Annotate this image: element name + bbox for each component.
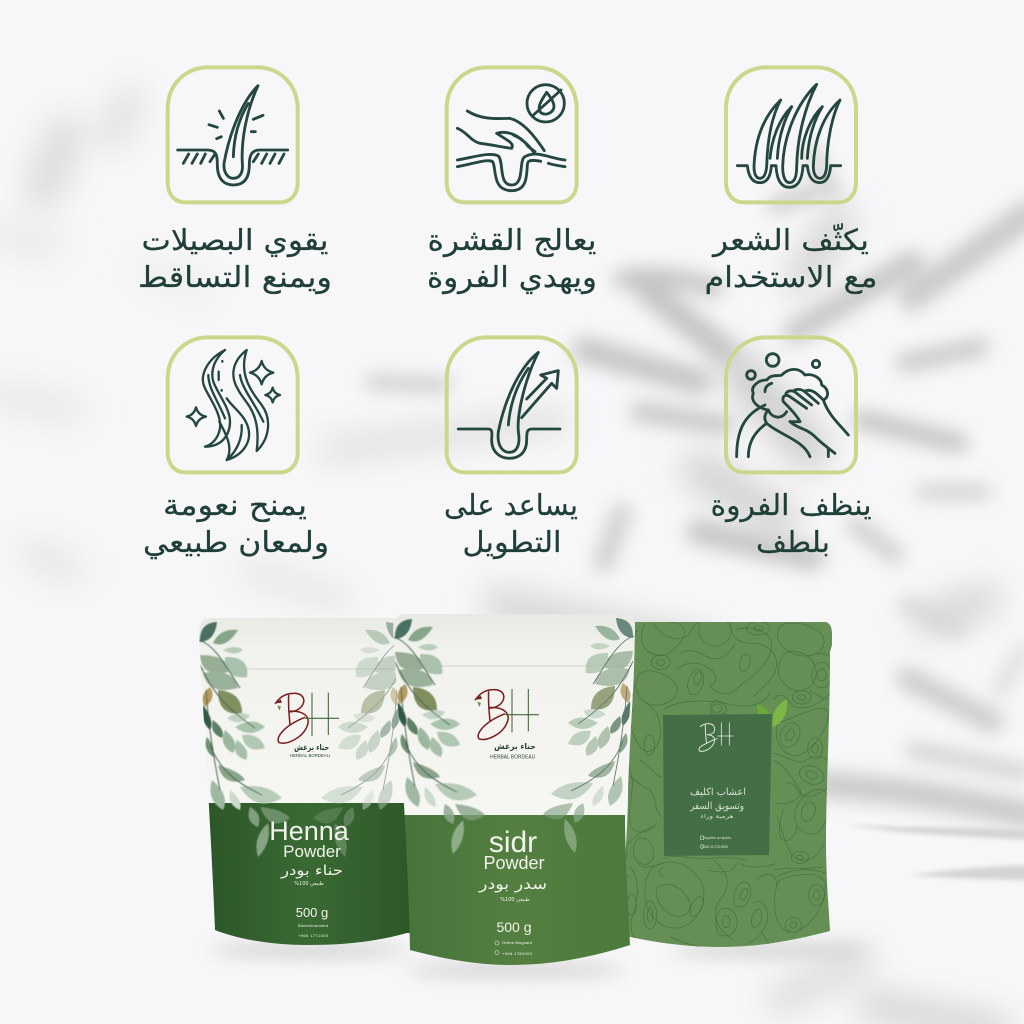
- henna logo: [275, 693, 339, 759]
- benefit: gentle cleansing: [710, 337, 872, 559]
- label: helps lengthening: التطويل: [462, 525, 562, 559]
- sidr logo: [475, 689, 539, 761]
- benefit: treats the scalp: [427, 67, 597, 294]
- benefit: strengthens follicles: [138, 67, 332, 294]
- label: cleans the scalp gently: بلطف: [756, 525, 830, 559]
- pouch label text: هرمية وراء: [700, 814, 734, 820]
- henna product text: Henna: [269, 816, 350, 846]
- pouch label text: 0000 12 170 0000: [702, 845, 728, 849]
- label: cleans the scalp gently: [710, 488, 872, 559]
- label: gives softness and natural shine: ولمعان طبيعي: [143, 525, 329, 560]
- icon: hand treating scalp with no-drop mark: [447, 67, 577, 202]
- henna product text: [269, 816, 350, 938]
- henna logo: HERBAL BORDEAU: [290, 753, 330, 759]
- label: helps lengthening: يساعد على: [444, 488, 578, 522]
- small logo: [699, 723, 733, 751]
- label: strengthens bulbs and stops hair fall: يقوي البصيلات: [142, 223, 328, 257]
- henna logo: حناء برغش: [294, 743, 329, 753]
- sidr product text: Online Bioguard: [502, 940, 532, 945]
- henna product text: Bioenvironment: [298, 923, 329, 928]
- label: treats and soothes scalp: يعالج القشرة: [428, 223, 596, 257]
- icon: hair follicle with up arrow: [447, 337, 577, 472]
- label: gives softness and natural shine: يمنح نعومة: [163, 488, 307, 522]
- henna product text: 500 g: [296, 905, 328, 920]
- label: treats and soothes scalp: ويهدي الفروة: [427, 260, 597, 294]
- label: helps lengthening: [444, 488, 578, 559]
- icon: dense hair follicles: [726, 67, 856, 202]
- sidr product text: [478, 826, 547, 956]
- icon: hands washing hair with foam: [726, 337, 856, 472]
- icon: shiny hair strands with sparkles: [168, 337, 298, 472]
- product: henna powder pouch: [195, 610, 420, 948]
- label: gives softness and natural shine: [143, 488, 329, 560]
- sidr logo: HERBAL BORDEAU: [490, 755, 535, 761]
- label: thickens hair with use: يكثّف الشعر: [711, 223, 869, 257]
- sidr product text: 500 g: [496, 919, 532, 935]
- icon: strong hair follicle: [168, 67, 298, 202]
- pouch label text: وتسويق السفر: [689, 801, 744, 812]
- benefit: thickens hair: [704, 67, 878, 294]
- contour line pattern: [620, 622, 833, 948]
- benefit: softness and shine: [143, 337, 329, 560]
- product: sidr powder pouch: [388, 610, 643, 970]
- henna product text: Powder: [283, 842, 341, 861]
- sidr product text: سدر بودر: [478, 875, 547, 893]
- botanical leaves right: [313, 622, 404, 857]
- sidr product text: Powder: [483, 853, 545, 873]
- sidr product text: sidr: [489, 826, 537, 859]
- sidr product text: طبيعي 100%: [500, 897, 530, 903]
- henna product text: طبيعي 100%: [294, 881, 324, 887]
- botanical leaves right: [543, 618, 634, 853]
- henna product text: +966 1771000: [298, 933, 329, 938]
- label: thickens hair with use: [704, 223, 878, 294]
- benefit: helps lengthen: [444, 337, 578, 559]
- label: strengthens bulbs and stops hair fall: [138, 223, 332, 294]
- pouch label text: Supplier au sports: [703, 836, 731, 840]
- label: thickens hair with use: مع الاستخدام: [704, 260, 878, 294]
- label: treats and soothes scalp: [427, 223, 597, 294]
- sidr product text: +966 1780000: [502, 951, 533, 956]
- sidr logo: حناء برغش: [494, 742, 536, 752]
- leaf sprout on label: [757, 699, 787, 729]
- botanical leaves left: [394, 619, 485, 854]
- botanical leaves left: [199, 622, 290, 857]
- henna product text: حناء بودر: [280, 863, 343, 879]
- pouch label text: [689, 787, 746, 849]
- product: green pattern pouch: [626, 622, 832, 947]
- pouch label panel: [663, 714, 772, 856]
- label: strengthens bulbs and stops hair fall: ويمنع التساقط: [138, 260, 332, 294]
- product shadows under pouches: [210, 944, 870, 976]
- pouch label text: اعشاب اكليف: [690, 787, 746, 798]
- label: cleans the scalp gently: ينظف الفروة: [710, 488, 872, 522]
